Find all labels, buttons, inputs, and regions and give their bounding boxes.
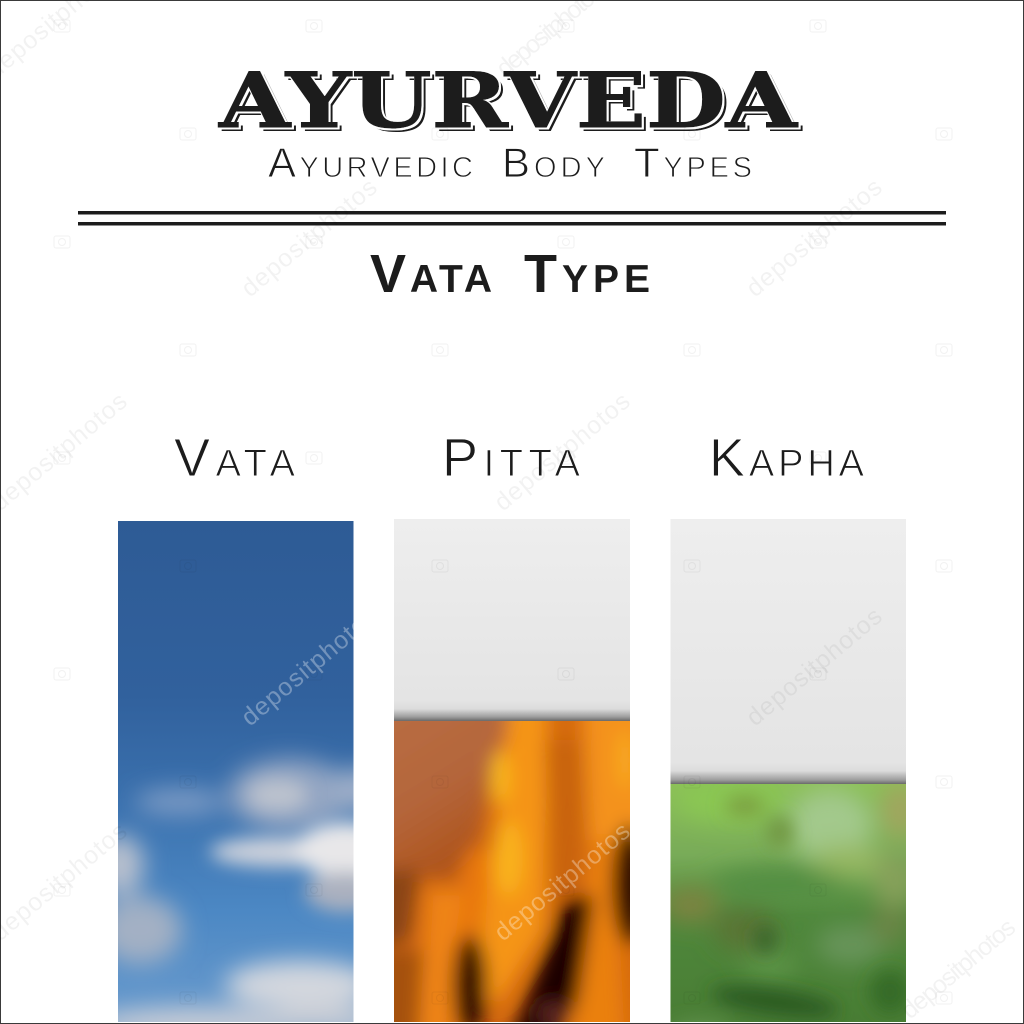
watermark: depositphotos: depositphotos [741, 602, 888, 732]
watermark: depositphotos: depositphotos [236, 173, 383, 303]
panel: Vata sky image [118, 521, 354, 1022]
watermark: depositphotos: depositphotos [896, 913, 1021, 1024]
watermark: depositphotos: depositphotos [741, 173, 888, 303]
double divider rule [78, 211, 946, 226]
subtitle: BODY [502, 139, 605, 186]
heading: Vata Type: VATA [370, 244, 492, 304]
watermark: depositphotos: depositphotos [236, 602, 383, 732]
watermark: depositphotos: depositphotos [489, 817, 636, 947]
subtitle: TYPES [634, 139, 752, 186]
column label: Pitta: PITTA [442, 428, 581, 488]
panel: Pitta covered top [394, 519, 630, 721]
subtitle [268, 139, 752, 186]
title: AYURVEDA [218, 56, 798, 145]
heading: Vata Type [370, 244, 650, 304]
subtitle: AYURVEDIC [268, 139, 473, 186]
column label: Vata: VATA [174, 428, 296, 488]
panel: Kapha foliage image [670, 784, 906, 1022]
watermark: depositphotos: depositphotos [489, 387, 636, 517]
panel: Kapha covered top [670, 519, 906, 784]
panel: Pitta fire image [394, 721, 630, 1022]
column label: Kapha: KAPHA [709, 428, 865, 488]
heading: Vata Type: TYPE [524, 244, 650, 304]
